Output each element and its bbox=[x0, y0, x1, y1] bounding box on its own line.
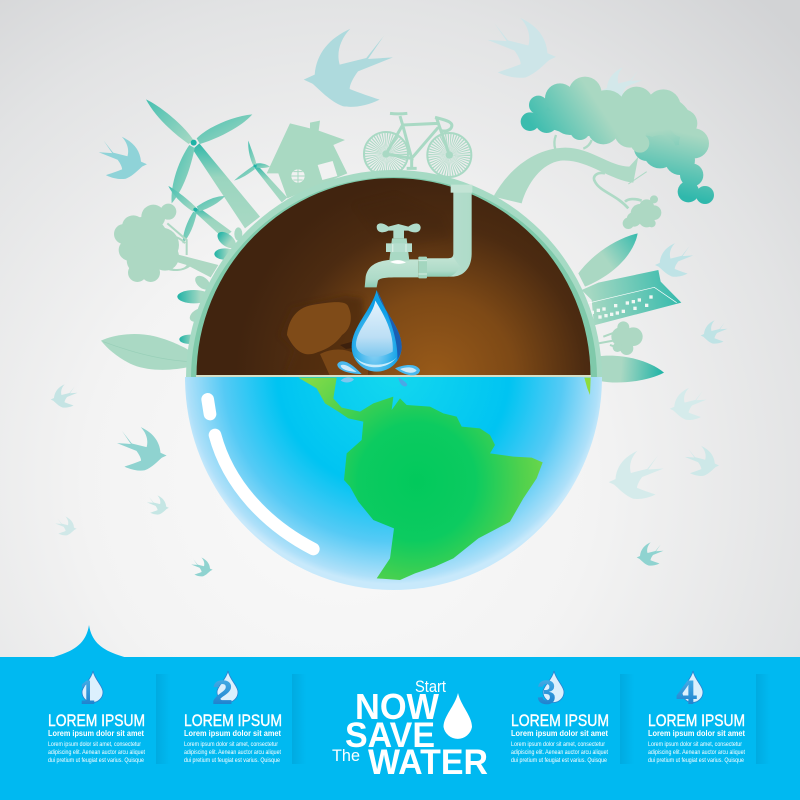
step 3 bbox=[511, 671, 609, 764]
big leaf bottom left bbox=[101, 334, 192, 370]
ground line bbox=[196, 375, 591, 377]
band background bbox=[0, 657, 800, 800]
small buds on the rim bbox=[177, 227, 242, 344]
wind turbine small bbox=[234, 141, 287, 202]
body text: dui pretium ut feugiat est varius. Quisque bbox=[48, 758, 145, 764]
globe bbox=[185, 170, 602, 590]
body text: dui pretium ut feugiat est varius. Quisque bbox=[511, 758, 608, 764]
leaf lower right bbox=[597, 356, 664, 383]
heading: LOREM IPSUM bbox=[48, 712, 145, 730]
body text: Lorem ipsum dolor sit amet, consectetur bbox=[648, 742, 742, 748]
bird: behind tree bbox=[602, 67, 642, 103]
body text: adipiscing elit. Aenean auctor arcu aliquet bbox=[511, 750, 608, 756]
step 4 bbox=[648, 671, 745, 764]
subheading: Lorem ipsum dolor sit amet bbox=[184, 728, 281, 738]
icon: white drop bbox=[444, 693, 472, 739]
body text bbox=[48, 742, 145, 764]
icon: drop number 4: 4 bbox=[676, 674, 697, 712]
glass highlight bbox=[208, 399, 313, 549]
bird: upper left bbox=[99, 137, 147, 179]
panel shadows bbox=[156, 674, 770, 764]
bird: left two bbox=[117, 427, 167, 471]
tree canopy left bbox=[521, 77, 649, 153]
body text: Lorem ipsum dolor sit amet, consectetur bbox=[48, 742, 141, 748]
building bbox=[582, 270, 681, 325]
blue footer band bbox=[0, 625, 800, 800]
bird: lower left bbox=[191, 558, 213, 576]
small tree lower right bbox=[598, 321, 643, 355]
body text: dui pretium ut feugiat est varius. Quisque bbox=[184, 758, 281, 764]
faucet and drop bbox=[337, 185, 472, 386]
upper rim bbox=[186, 170, 602, 378]
subheading: Lorem ipsum dolor sit amet bbox=[511, 728, 608, 738]
bird: left one bbox=[51, 384, 78, 408]
small tree top right bbox=[623, 195, 661, 229]
word: Start: Start bbox=[415, 677, 446, 696]
leaf upper bbox=[578, 233, 638, 287]
soil half bbox=[196, 178, 590, 376]
drop peak bbox=[50, 625, 128, 658]
bird: top large bbox=[304, 29, 393, 107]
icon: drop number 1: 1 bbox=[80, 674, 95, 712]
tap body bbox=[365, 223, 427, 287]
continent: Americas bbox=[298, 378, 591, 580]
bird: right four bbox=[609, 451, 664, 499]
icon: drop number 3: 3 bbox=[537, 674, 556, 712]
heading: LOREM IPSUM bbox=[511, 712, 609, 730]
frame bbox=[386, 113, 452, 168]
soil continents bbox=[280, 195, 450, 376]
bird: right five bbox=[685, 446, 719, 476]
body text: Lorem ipsum dolor sit amet, consectetur bbox=[184, 742, 278, 748]
subheading: Lorem ipsum dolor sit amet bbox=[648, 728, 745, 738]
body text bbox=[648, 742, 745, 764]
word: NOW: NOW bbox=[355, 686, 439, 727]
house bbox=[267, 121, 347, 198]
step 1 bbox=[48, 671, 145, 764]
heading: LOREM IPSUM bbox=[648, 712, 745, 730]
pipe bbox=[427, 185, 472, 277]
bicycle bbox=[364, 113, 471, 177]
step 2 bbox=[184, 671, 282, 764]
tree canopy right bbox=[620, 87, 714, 204]
body text: Lorem ipsum dolor sit amet, consectetur bbox=[511, 742, 605, 748]
body text: adipiscing elit. Aenean auctor arcu aliquet bbox=[184, 750, 281, 756]
wind turbine large bbox=[146, 99, 260, 228]
icon: drop number 2: 2 bbox=[212, 674, 233, 712]
bird: top right bbox=[488, 18, 556, 78]
bird: right one bbox=[655, 243, 693, 277]
wheel front bbox=[427, 133, 471, 177]
body text: adipiscing elit. Aenean auctor arcu aliquet bbox=[48, 750, 145, 756]
left scenery: wind turbines, house, tree, leaves bbox=[101, 99, 347, 370]
bird: right two bbox=[701, 320, 728, 344]
wind turbine medium bbox=[168, 186, 232, 243]
bird: left three bbox=[147, 495, 169, 515]
body text: dui pretium ut feugiat est varius. Quisque bbox=[648, 758, 745, 764]
right scenery: tree, leaves, building bbox=[493, 77, 714, 383]
water half bbox=[185, 377, 602, 590]
heading: LOREM IPSUM bbox=[184, 712, 282, 730]
word: The: The bbox=[332, 746, 360, 765]
body text bbox=[184, 742, 281, 764]
word: WATER: WATER bbox=[368, 743, 488, 782]
water drop bbox=[352, 290, 402, 372]
title lockup bbox=[332, 677, 488, 782]
word: SAVE: SAVE bbox=[345, 716, 435, 755]
tree left bbox=[114, 204, 218, 282]
bird: lower right bbox=[637, 542, 664, 566]
bird: left four bbox=[55, 517, 77, 535]
flock of swallows bbox=[51, 18, 727, 576]
big tree trunk bbox=[493, 135, 647, 208]
water splashes bbox=[337, 361, 420, 386]
subheading: Lorem ipsum dolor sit amet bbox=[48, 728, 144, 738]
body text bbox=[511, 742, 608, 764]
wheel rear bbox=[364, 132, 408, 176]
body text: adipiscing elit. Aenean auctor arcu aliquet bbox=[648, 750, 745, 756]
bird: right three bbox=[670, 388, 706, 420]
